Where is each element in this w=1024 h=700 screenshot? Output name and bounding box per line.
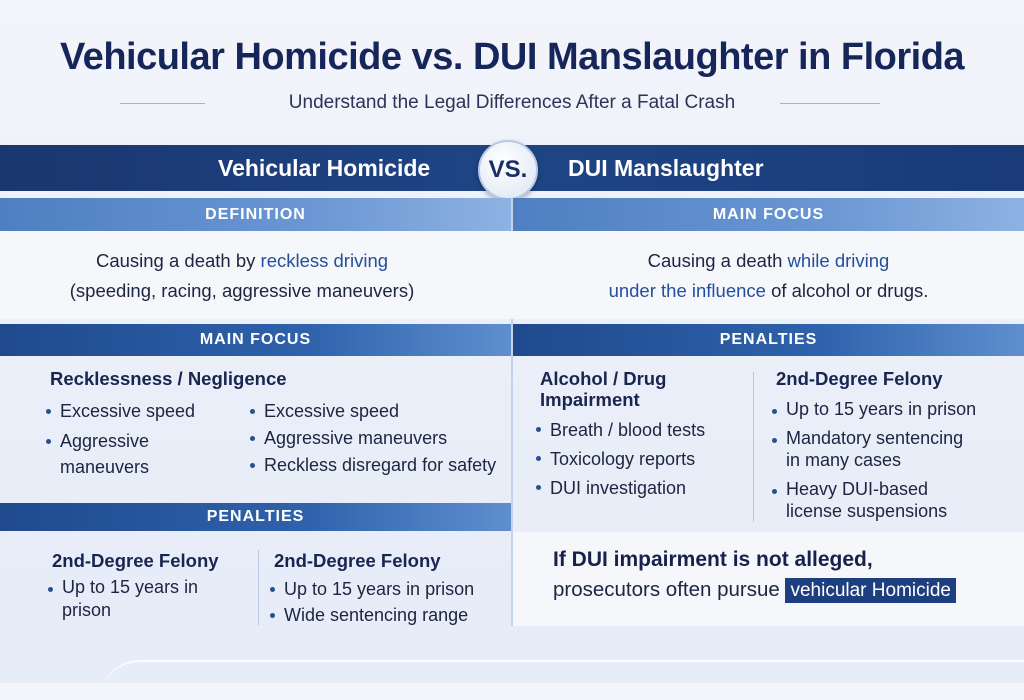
right penalties column: license suspensions (786, 501, 947, 521)
main focus right text (609, 250, 928, 301)
left heading: Vehicular Homicide (218, 155, 430, 181)
main focus left content: Recklessness / Negligence (50, 368, 287, 389)
left penalties content: Up to 15 years in (62, 577, 198, 597)
main focus left content: Aggressive maneuvers (264, 428, 447, 448)
penalties left header: PENALTIES (207, 508, 304, 525)
banner (0, 145, 1024, 191)
penalties left header (0, 503, 511, 531)
alcohol/drug column: Impairment (540, 389, 640, 410)
main focus left content: Excessive speed (264, 401, 399, 421)
text: Wide sentencing range (284, 605, 468, 625)
right penalties column: in many cases (786, 450, 901, 470)
left penalties content: prison (62, 600, 111, 620)
penalties right header (513, 324, 1024, 356)
callout: prosecutors often pursue vehicular Homicide (553, 578, 951, 601)
alcohol/drug column: Breath / blood tests (550, 420, 705, 440)
vs badge (478, 140, 538, 200)
bottom decorative swoosh (100, 660, 1024, 700)
right penalties column (772, 368, 976, 521)
alcohol/drug column: Alcohol / Drug (540, 368, 666, 389)
alcohol/drug column: Toxicology reports (550, 449, 695, 469)
panel: main focus right header: MAIN FOCUS (713, 206, 824, 222)
callout: If DUI impairment is not alleged, (553, 548, 873, 571)
main focus right text: Causing a death while driving (648, 250, 889, 271)
main focus left content: Aggressive (60, 431, 149, 451)
title: Vehicular Homicide vs. DUI Manslaughter in Florida (60, 36, 964, 78)
vs badge: VS. (489, 156, 527, 183)
right penalties column: Up to 15 years in prison (786, 399, 976, 419)
main focus left content: Reckless disregard for safety (264, 455, 496, 475)
definition text (70, 250, 414, 301)
panel: definition (0, 198, 511, 231)
right penalties column: Heavy DUI-based (786, 479, 928, 499)
left penalties content: 2nd-Degree Felony (52, 550, 219, 571)
right penalties column: 2nd-Degree Felony (776, 368, 943, 389)
main focus left header (0, 324, 511, 356)
right heading: DUI Manslaughter (568, 155, 764, 181)
main focus left content: maneuvers (60, 457, 149, 477)
alcohol/drug column: DUI investigation (550, 478, 686, 498)
right penalties column: Mandatory sentencing (786, 428, 963, 448)
penalties right header: PENALTIES (720, 331, 817, 348)
main focus left header: MAIN FOCUS (200, 331, 311, 348)
definition text: Causing a death by reckless driving (96, 250, 388, 271)
text: 2nd-Degree Felony (274, 550, 441, 571)
definition text: (speeding, racing, aggressive maneuvers) (70, 280, 414, 301)
main focus left content (46, 368, 496, 477)
main focus right text: under the influence of alcohol or drugs. (609, 280, 928, 301)
panel: main focus right header (513, 198, 1024, 231)
main focus left content: Excessive speed (60, 401, 195, 421)
callout (513, 532, 1024, 626)
divider (511, 198, 513, 626)
text: Up to 15 years in prison (284, 579, 474, 599)
left penalties content (48, 550, 219, 620)
alcohol/drug column (536, 368, 705, 498)
subtitle: Understand the Legal Differences After a Fatal Crash (289, 92, 735, 113)
panel: definition: DEFINITION (205, 206, 306, 222)
